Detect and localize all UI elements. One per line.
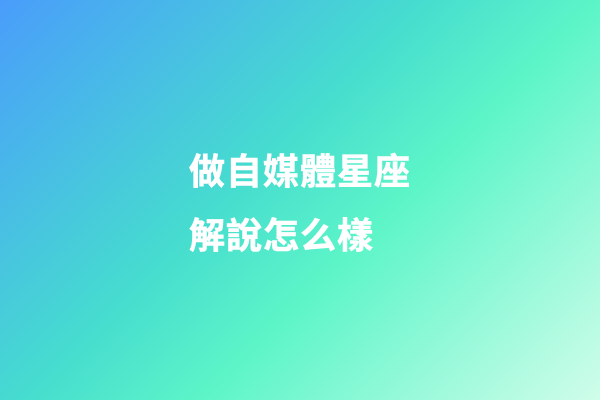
title bbox=[189, 151, 411, 256]
title: 解說怎么樣 bbox=[189, 215, 374, 256]
title: 做自媒體星座 bbox=[189, 151, 411, 192]
